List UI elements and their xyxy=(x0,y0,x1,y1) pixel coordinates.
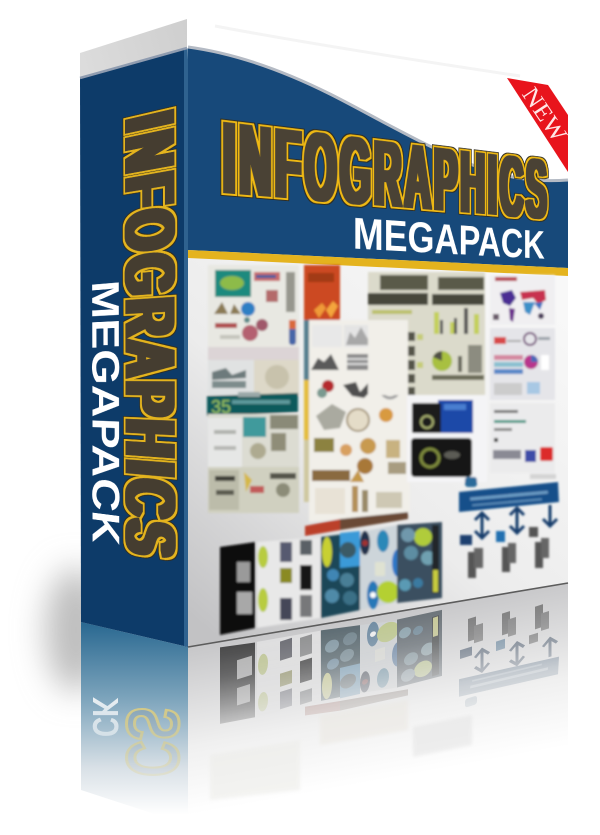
tile: blue banner with diagram xyxy=(459,477,559,578)
tile: phone UI sheet xyxy=(407,395,487,482)
tile: construction sheet xyxy=(368,272,485,396)
spine blue panel xyxy=(80,48,188,647)
reflected spine lettering: CK xyxy=(85,697,126,737)
ribbon label: NEW xyxy=(516,83,572,147)
icon: nodes xyxy=(460,535,472,545)
tile: doodles sheet xyxy=(208,414,299,513)
tile: grey charts and food sheet xyxy=(309,320,410,522)
reflected spine lettering: CS xyxy=(111,707,194,777)
reflected collage xyxy=(220,604,559,724)
spine reflection xyxy=(81,622,188,805)
tile: pastel strip xyxy=(208,347,299,360)
tile: world map and stats sheet xyxy=(490,275,556,479)
tile: teal 35 banner xyxy=(207,392,298,417)
cast shadow xyxy=(46,568,106,692)
tile: orange poster xyxy=(304,265,340,502)
icon: double arrows xyxy=(475,505,557,538)
front title: INFOGRAPHICS xyxy=(220,104,568,332)
tile: dark circles xyxy=(397,522,442,603)
tile: white icon set xyxy=(257,537,320,628)
spine subtitle: MEGAPACK: MEGAPACK xyxy=(83,267,121,540)
reflected spine lettering xyxy=(92,697,181,776)
spine title: INFOGRAPHICS: INFOGRAPHICS xyxy=(108,95,172,538)
tile: red and brown strip xyxy=(305,512,408,536)
faint far reflections xyxy=(210,700,472,800)
front face xyxy=(187,19,568,647)
collage of infographic thumbnails xyxy=(207,265,559,635)
tile: blue circles xyxy=(321,531,360,618)
spine top flap xyxy=(80,19,187,78)
front subtitle: MEGAPACK: MEGAPACK xyxy=(388,229,568,332)
front blue wave panel xyxy=(188,48,568,268)
banner number: 35 xyxy=(211,397,231,417)
tile: black device xyxy=(220,542,255,635)
bottom edge xyxy=(188,583,568,647)
gold band xyxy=(188,250,568,276)
spine title: INFOGRAPHICS xyxy=(83,95,178,562)
front title: INFOGRAPHICS: INFOGRAPHICS xyxy=(227,104,568,295)
tile: light circles xyxy=(360,525,404,610)
lower collage row xyxy=(220,477,559,635)
front white top xyxy=(187,19,568,182)
spine xyxy=(80,19,190,647)
front reflection floor xyxy=(188,583,568,815)
tile: silhouettes sheet xyxy=(208,360,299,395)
front lower panel xyxy=(188,250,568,647)
tile: world map sheet xyxy=(208,265,299,347)
